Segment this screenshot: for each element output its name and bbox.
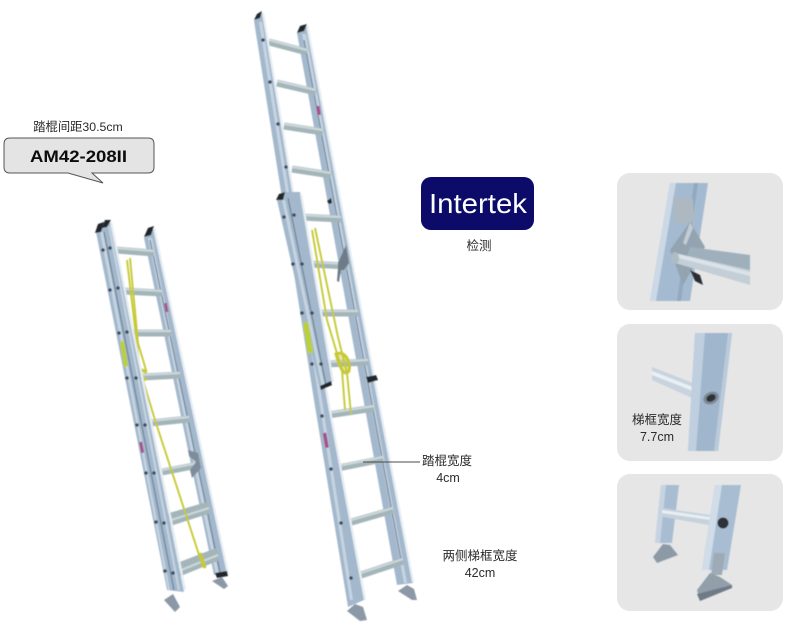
rungs: [116, 248, 218, 573]
right foot: [398, 585, 417, 600]
spacing label: 踏棍间距30.5cm: [33, 120, 123, 134]
pink rail marks: [139, 303, 168, 453]
left foot: [347, 604, 367, 621]
rung lock: [337, 245, 349, 282]
frame spacing label: 42cm: [465, 566, 495, 580]
frame spacing label: 两侧梯框宽度: [442, 548, 518, 563]
rung lock: [188, 450, 201, 478]
callout: model number: AM42-208II: [30, 147, 127, 166]
rail holes: [101, 246, 175, 575]
rung width label: [422, 453, 472, 485]
yellow label: [120, 341, 128, 367]
left double rail: [95, 220, 185, 592]
front section right rail end cap: [366, 375, 378, 383]
right rail: [144, 226, 228, 578]
pink rail marks: [316, 106, 329, 448]
front section top cap: [327, 198, 332, 204]
panel: foot detail: [617, 474, 783, 611]
Intertek logo: [421, 177, 534, 230]
rail holes: [261, 38, 353, 580]
leader line: rung width: [363, 461, 420, 463]
callout: model number: [4, 138, 154, 183]
rung width label: 4cm: [436, 471, 460, 485]
yellow label: [303, 322, 313, 354]
yellow rope: [127, 258, 205, 568]
front section left rail: [276, 192, 333, 390]
panel: frame width detail: 梯框宽度: [632, 412, 682, 427]
long left rail: [254, 11, 365, 607]
yellow ropes and knot: [312, 228, 351, 414]
small ladder (retracted): [95, 220, 228, 612]
large ladder (extended): [254, 11, 417, 621]
certification caption: 检测: [466, 238, 492, 253]
rung width label: 踏棍宽度: [422, 453, 472, 468]
left foot: [164, 594, 180, 612]
panel: frame width detail: 7.7cm: [640, 430, 674, 444]
frame spacing label: [442, 548, 518, 580]
panel: hinge detail: [617, 173, 783, 310]
rungs: [269, 40, 403, 576]
Intertek logo: Intertek: [429, 188, 528, 219]
right foot: [212, 577, 228, 589]
long right rail: [297, 24, 413, 585]
panel: frame width detail: [617, 324, 783, 461]
